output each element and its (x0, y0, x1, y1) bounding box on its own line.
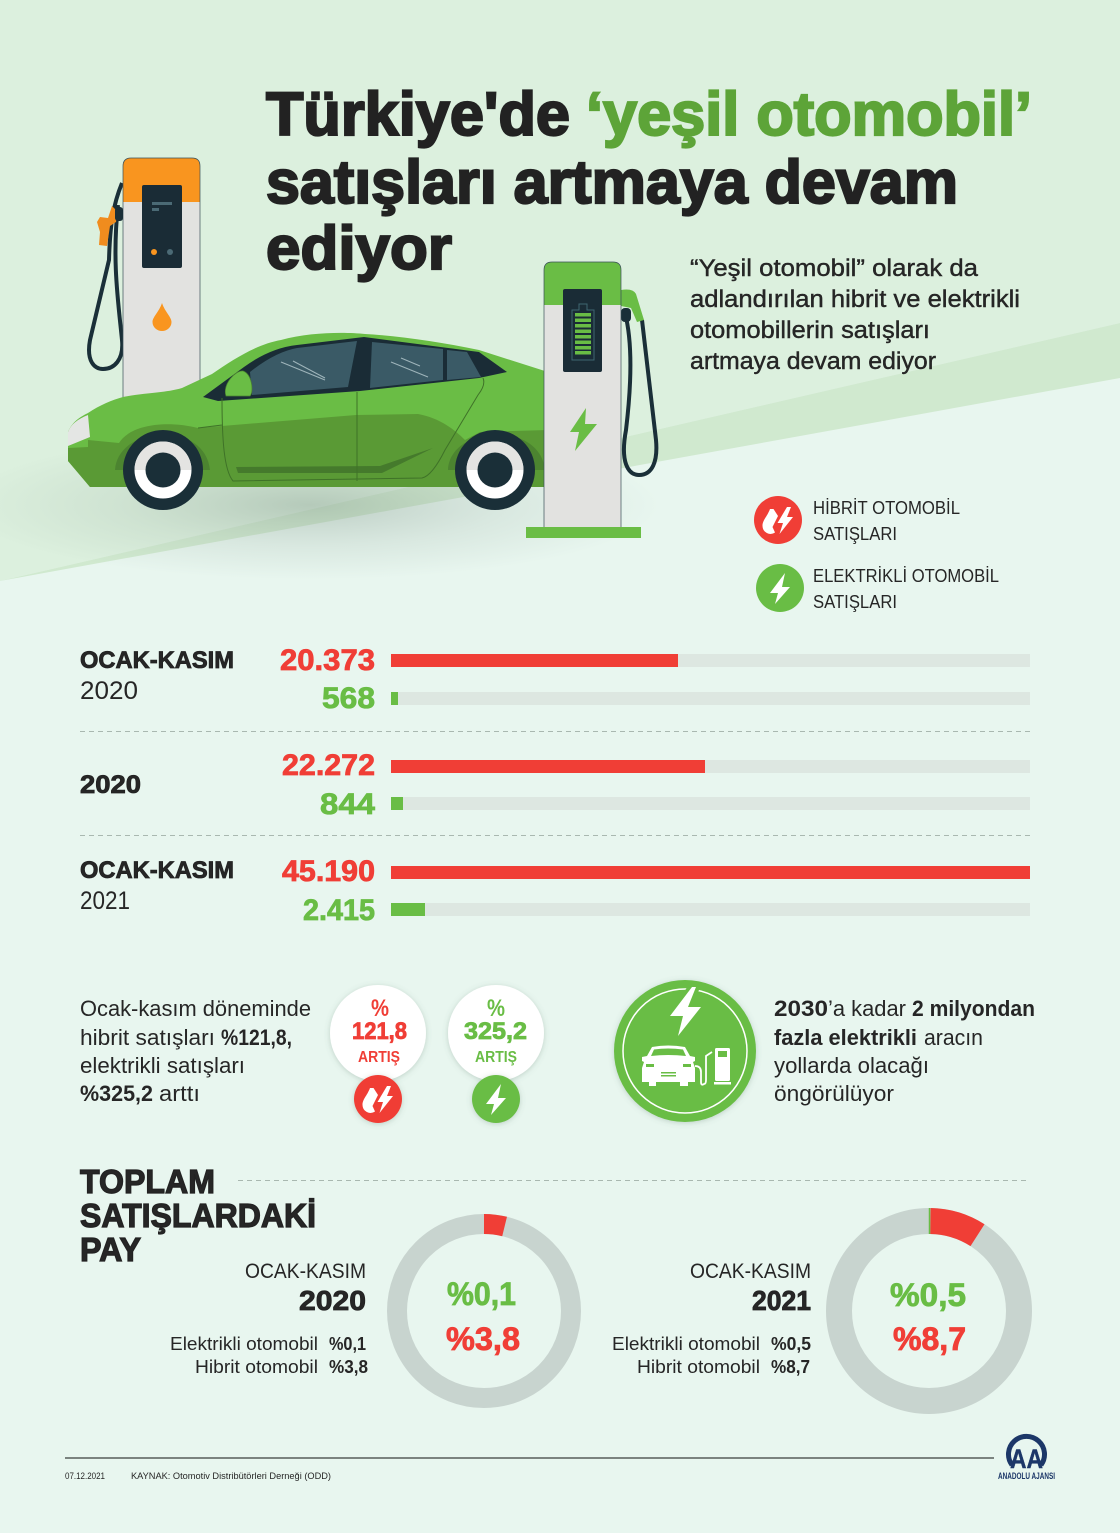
badge: hybrid increase: 121,8 (352, 1018, 407, 1045)
legend labels: HİBRİT OTOMOBİL (813, 498, 960, 518)
row: 2020: 844 (320, 788, 375, 821)
row: 2020: 2020 (80, 771, 141, 799)
2020 share labels (170, 1260, 368, 1377)
subtitle text: adlandırılan hibrit ve elektrikli (690, 286, 1020, 313)
row: Ocak-Kasım 2021 (80, 855, 1030, 927)
legend (754, 496, 999, 612)
2020 share labels: %3,8 (329, 1356, 368, 1377)
forecast text block: fazla elektrikli (774, 1025, 917, 1050)
logo: Anadolu Ajansi (998, 1436, 1055, 1481)
forecast text block (774, 996, 1035, 1106)
forecast text block: yollarda olacağı (774, 1053, 929, 1078)
increase text block: Ocak-kasım döneminde (80, 996, 311, 1021)
2021 share labels (612, 1260, 811, 1377)
badge: electric increase: 325,2 (464, 1018, 527, 1045)
badge: electric increase (448, 985, 544, 1123)
subtitle text: “Yeşil otomobil” olarak da (690, 255, 979, 282)
donut chart 2020 (397, 1224, 571, 1398)
increase text block: arttı (159, 1081, 200, 1106)
row: 2020 (80, 749, 1030, 821)
2021 share labels: Hibrit otomobil (637, 1356, 760, 1377)
increase text block: hibrit satışları (80, 1025, 215, 1050)
row: Ocak-Kasım 2020 (80, 644, 1030, 715)
row: Ocak-Kasım 2020: OCAK-KASIM (80, 647, 234, 674)
row: Ocak-Kasım 2021: 2021 (80, 887, 130, 915)
donut chart 2020: %0,1 (447, 1276, 516, 1312)
logo: Anadolu Ajansi: ANADOLU AJANSI (998, 1471, 1055, 1481)
title: ‘yeşil otomobil’ (586, 80, 1032, 148)
bar chart: sales (80, 644, 1030, 927)
2020 share labels: 2020 (299, 1285, 366, 1316)
legend labels (813, 498, 999, 612)
forecast text block: 2030 (774, 996, 828, 1021)
section heading: PAY (80, 1231, 141, 1268)
increase text block (80, 996, 311, 1106)
row: Ocak-Kasım 2020: 2020 (80, 677, 138, 705)
title: Türkiye'de (266, 80, 570, 148)
legend labels: SATIŞLARI (813, 592, 897, 612)
section heading: SATIŞLARDAKİ (80, 1197, 316, 1234)
title: satışları artmaya devam (266, 148, 958, 216)
badge: electric increase: ARTIŞ (475, 1049, 517, 1066)
title: ediyor (266, 214, 452, 282)
2020 share labels: OCAK-KASIM (245, 1260, 366, 1283)
legend icon: electric (756, 564, 804, 612)
2020 share labels: %0,1 (329, 1333, 366, 1354)
source footer: 07.12.2021 (65, 1471, 105, 1481)
section heading: TOPLAM (80, 1163, 215, 1200)
row: Ocak-Kasım 2020: 568 (322, 682, 375, 715)
source footer: KAYNAK: Otomotiv Distribütörleri Derneği (ODD) (131, 1471, 331, 1481)
increase text block: %325,2 (80, 1081, 153, 1106)
increase text block: %121,8, (221, 1025, 292, 1050)
2021 share labels: %0,5 (771, 1333, 811, 1354)
badge: hybrid increase (330, 985, 426, 1123)
badge: hybrid increase: % (371, 995, 389, 1022)
donut chart 2021 (839, 1208, 1019, 1401)
row: Ocak-Kasım 2021: OCAK-KASIM (80, 857, 234, 884)
left fuel pump (89, 158, 200, 402)
2021 share labels: 2021 (752, 1285, 811, 1316)
donut chart 2021: %0,5 (890, 1277, 966, 1313)
forecast text block: aracın (924, 1025, 983, 1050)
right electric charger (526, 262, 656, 538)
row: Ocak-Kasım 2020: 20.373 (280, 644, 375, 677)
subtitle text: artmaya devam ediyor (690, 348, 936, 375)
row: 2020: 22.272 (282, 749, 375, 782)
section heading (80, 1163, 316, 1268)
2021 share labels: %8,7 (771, 1356, 810, 1377)
donut chart 2021: %8,7 (893, 1321, 966, 1357)
2020 share labels: Hibrit otomobil (195, 1356, 318, 1377)
subtitle text: otomobillerin satışları (690, 317, 930, 344)
green car (68, 333, 548, 510)
2021 share labels: Elektrikli otomobil (612, 1333, 760, 1354)
badge: electric increase: % (487, 995, 505, 1022)
donut chart 2020: %3,8 (446, 1321, 520, 1357)
2021 share labels: OCAK-KASIM (690, 1260, 811, 1283)
increase text block: elektrikli satışları (80, 1053, 245, 1078)
title (266, 80, 1032, 282)
forecast text block: ’a kadar (828, 996, 906, 1021)
forecast text block: 2 milyondan (912, 996, 1035, 1021)
legend labels: ELEKTRİKLİ OTOMOBİL (813, 566, 999, 586)
logo: Anadolu Ajansi: AA (1010, 1444, 1043, 1474)
forecast text block: öngörülüyor (774, 1081, 894, 1106)
row: Ocak-Kasım 2021: 45.190 (282, 855, 375, 888)
legend icon: hybrid (754, 496, 802, 544)
row: Ocak-Kasım 2021: 2.415 (303, 894, 375, 927)
badge: hybrid increase: ARTIŞ (358, 1049, 400, 1066)
2020 share labels: Elektrikli otomobil (170, 1333, 318, 1354)
legend labels: SATIŞLARI (813, 524, 897, 544)
icon: electric car and charger (614, 980, 756, 1122)
subtitle text (690, 255, 1020, 375)
